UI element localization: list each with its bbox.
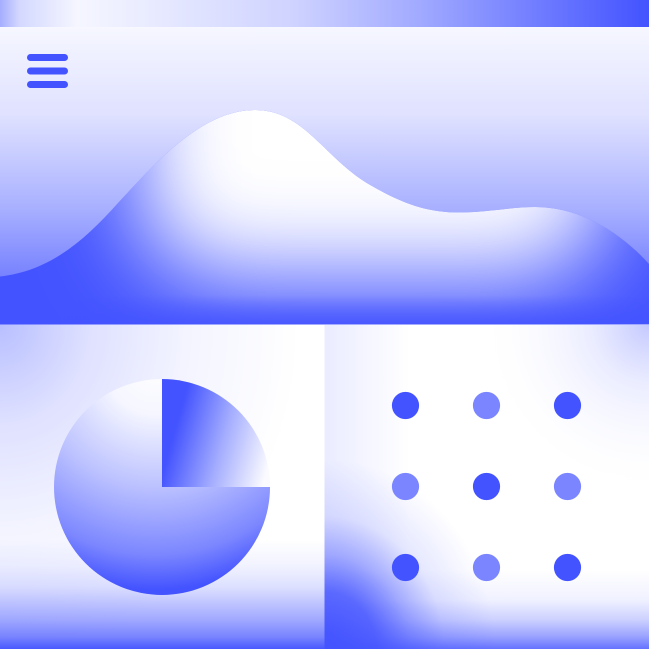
panel: area chart [0,0,649,325]
panel: pie chart [0,324,324,649]
dot panel left edge glow [324,325,410,649]
top bar [0,0,649,27]
pie highlighted slice [162,379,270,487]
dot panel background [324,324,649,649]
dots [392,392,581,581]
panel: dot grid [324,324,649,649]
chart background [0,27,649,324]
pie panel background [0,324,324,649]
dot panel corner glow [324,459,494,649]
pie panel bottom glow [0,540,324,649]
pie main body [54,379,270,595]
dot panel bottom glow [324,570,649,649]
dot panel top-right glow [479,325,649,495]
area chart wave [0,110,649,316]
icon: hamburger menu [27,54,68,88]
